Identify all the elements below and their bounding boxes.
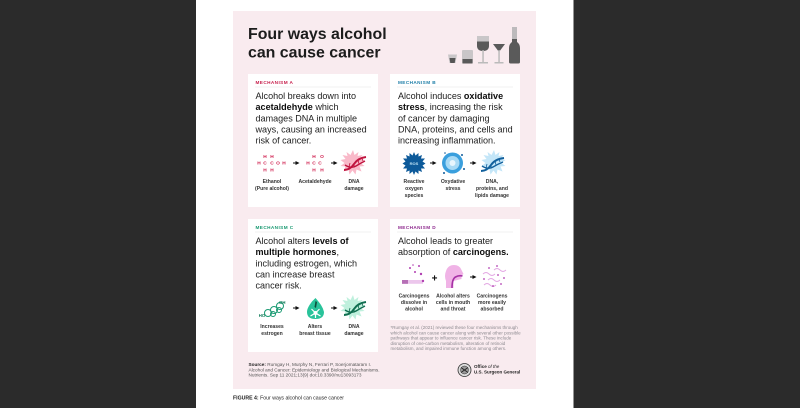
source citation: Alcohol and Cancer: Epidemiology and Biological Mechanisms. [248, 367, 380, 372]
icon: estrogen molecule [259, 300, 285, 318]
footnote: disruption of one-carbon metabolism, alteration of retinoid [390, 341, 506, 346]
figure caption: FIGURE 4: Four ways alcohol can cause cancer [233, 396, 344, 402]
icon: estrogen molecule: OH [279, 300, 285, 305]
icon: acetaldehyde molecule: H [320, 168, 324, 174]
arrow [430, 162, 436, 164]
text: mechanism C: can increase breast [256, 269, 335, 279]
caption: alters breast tissue: breast tissue [299, 331, 331, 337]
caption: DNA proteins lipids: proteins, and [476, 186, 508, 192]
panel: mechanism C [248, 219, 378, 352]
text: mechanism D: Alcohol leads to greater [398, 236, 493, 246]
text: mechanism B: stress [398, 102, 425, 112]
icon: ethanol molecule [257, 154, 286, 174]
text: mechanism C: including estrogen, which [256, 258, 357, 268]
text: mechanism A: damages DNA in multiple [256, 113, 357, 123]
caption: increases estrogen: Increases [260, 324, 284, 330]
icon: ethanol molecule: H [270, 168, 274, 174]
text: mechanism B: oxidative [464, 91, 503, 101]
plus sign: + [432, 274, 438, 284]
caption: DNA damage: DNA [348, 179, 360, 185]
label: mechanism A: MECHANISM A [256, 80, 294, 85]
text: mechanism A: which [313, 102, 338, 112]
caption: DNA proteins lipids: lipids damage [475, 193, 509, 199]
title: Four ways alcohol [248, 26, 387, 43]
panel: mechanism A [248, 74, 378, 207]
caption: more easily absorbed: Carcinogens [477, 294, 508, 300]
text: mechanism A: acetaldehyde [256, 102, 313, 112]
icon: acetaldehyde molecule: O [320, 154, 324, 160]
source citation: Nutrients. Sep 11 2021;13(9) doi:10.3390/nu13093173 [248, 373, 362, 378]
caption: alcohol alters cells: cells in mouth [436, 300, 470, 306]
text: mechanism C: Alcohol alters [256, 236, 312, 246]
icon: ethanol molecule: H [282, 161, 286, 167]
icon: acetaldehyde molecule: C [312, 161, 316, 167]
icon: alcohol glasses [448, 27, 520, 64]
icon: ethanol molecule: C [263, 161, 267, 167]
text: mechanism B: increasing inflammation. [398, 135, 496, 145]
caption: ethanol: (Pure alcohol) [255, 186, 289, 192]
text: mechanism C: , [336, 247, 339, 257]
caption: ethanol: Ethanol [263, 179, 282, 185]
page sheet [196, 0, 574, 408]
source citation: Source: [248, 362, 266, 367]
panel: mechanism B [390, 74, 520, 207]
icon: acetaldehyde molecule: H [312, 168, 316, 174]
icon: oxidative stress [442, 152, 465, 174]
icon: breast tissue [307, 298, 324, 319]
icon: cigarette and carcinogens [402, 264, 424, 284]
caption: increases estrogen: estrogen [261, 331, 283, 337]
caption: more easily absorbed: more easily [478, 300, 506, 306]
icon: estrogen molecule: HO [259, 313, 266, 318]
text: mechanism C: cancer risk. [256, 280, 302, 290]
arrow [470, 162, 476, 164]
footnote: *Rumgay et al. (2021) reviewed these four mechanisms through [390, 325, 518, 330]
label: mechanism D: MECHANISM D [398, 225, 436, 230]
footnote: pathways that appear to influence cancer risk. These include [390, 336, 512, 341]
text: mechanism B: of cancer by damaging [398, 113, 490, 123]
caption: DNA damage: damage [344, 186, 364, 192]
caption: DNA damage: damage [344, 331, 364, 337]
arrow [331, 307, 336, 309]
icon: absorbed carcinogens [483, 265, 506, 287]
caption: alters breast tissue: Alters [308, 324, 322, 330]
icon: DNA damage [481, 150, 506, 174]
arrow [293, 307, 298, 309]
label: mechanism B: MECHANISM B [398, 80, 436, 85]
caption: oxidative stress: stress [445, 186, 461, 192]
icon: acetaldehyde molecule [306, 154, 324, 174]
source citation: Rumgay H, Murphy N, Ferrari P, Soerjomataram I. [266, 362, 371, 367]
icon: DNA damage [340, 150, 366, 174]
icon: ethanol molecule: H [257, 161, 261, 167]
text: mechanism B: DNA, proteins, and cells and [398, 124, 513, 134]
icon: ethanol molecule: H [270, 154, 274, 160]
footnote: metabolism, and impaired immune function among others. [390, 346, 506, 351]
icon: acetaldehyde molecule: H [312, 154, 316, 160]
caption: carcinogens dissolve: Carcinogens [399, 294, 430, 300]
footnote: which alcohol can cause cancer along with several other possible [390, 330, 521, 335]
caption: alcohol alters cells: and throat [441, 306, 466, 312]
icon: ethanol molecule: C [270, 161, 274, 167]
arrow [470, 276, 476, 278]
logo text: surgeon general: U.S. Surgeon General [474, 370, 520, 374]
caption: alcohol alters cells: Alcohol alters [436, 294, 470, 300]
text: mechanism C: levels of [312, 236, 350, 246]
caption: reactive oxygen species: species [405, 193, 424, 199]
caption: reactive oxygen species: oxygen [405, 186, 423, 192]
icon: acetaldehyde molecule: H [306, 161, 310, 167]
icon: DNA damage [340, 295, 366, 320]
text: mechanism A: Alcohol breaks down into [256, 91, 356, 101]
icon: ethanol molecule: H [263, 168, 267, 174]
icon: surgeon general seal [458, 364, 471, 376]
caption: more easily absorbed: absorbed [481, 306, 503, 312]
text: mechanism A: risk of cancer. [256, 135, 311, 145]
text: mechanism B: Alcohol induces [398, 91, 464, 101]
caption: reactive oxygen species: Reactive [404, 179, 425, 185]
title: can cause cancer [248, 45, 381, 62]
icon: ethanol molecule: H [263, 154, 267, 160]
logo text: surgeon general: Office of the [474, 364, 499, 369]
text: mechanism A: ways, causing an increased [254, 124, 367, 134]
icon: mouth and throat [445, 265, 464, 288]
caption: DNA proteins lipids: DNA, [486, 179, 499, 185]
caption: acetaldehyde: Acetaldehyde [298, 179, 332, 185]
icon: reactive oxygen species: ROS [410, 161, 419, 166]
icon: acetaldehyde molecule: C [318, 161, 322, 167]
caption: carcinogens dissolve: alcohol [405, 306, 423, 312]
caption: oxidative stress: Oxydative [441, 179, 465, 185]
caption: DNA damage: DNA [348, 324, 360, 330]
icon: ethanol molecule: O [276, 161, 280, 167]
panel: mechanism D [390, 219, 520, 320]
text: mechanism D: carcinogens. [453, 247, 509, 257]
label: mechanism C: MECHANISM C [256, 225, 294, 230]
text: mechanism D: absorption of [398, 247, 453, 257]
arrow [293, 162, 298, 164]
arrow [331, 162, 336, 164]
text: mechanism C: multiple hormones [256, 247, 336, 257]
caption: carcinogens dissolve: dissolve in [401, 300, 427, 306]
text: mechanism B: , increasing the risk [425, 102, 503, 112]
background panel [233, 11, 536, 389]
